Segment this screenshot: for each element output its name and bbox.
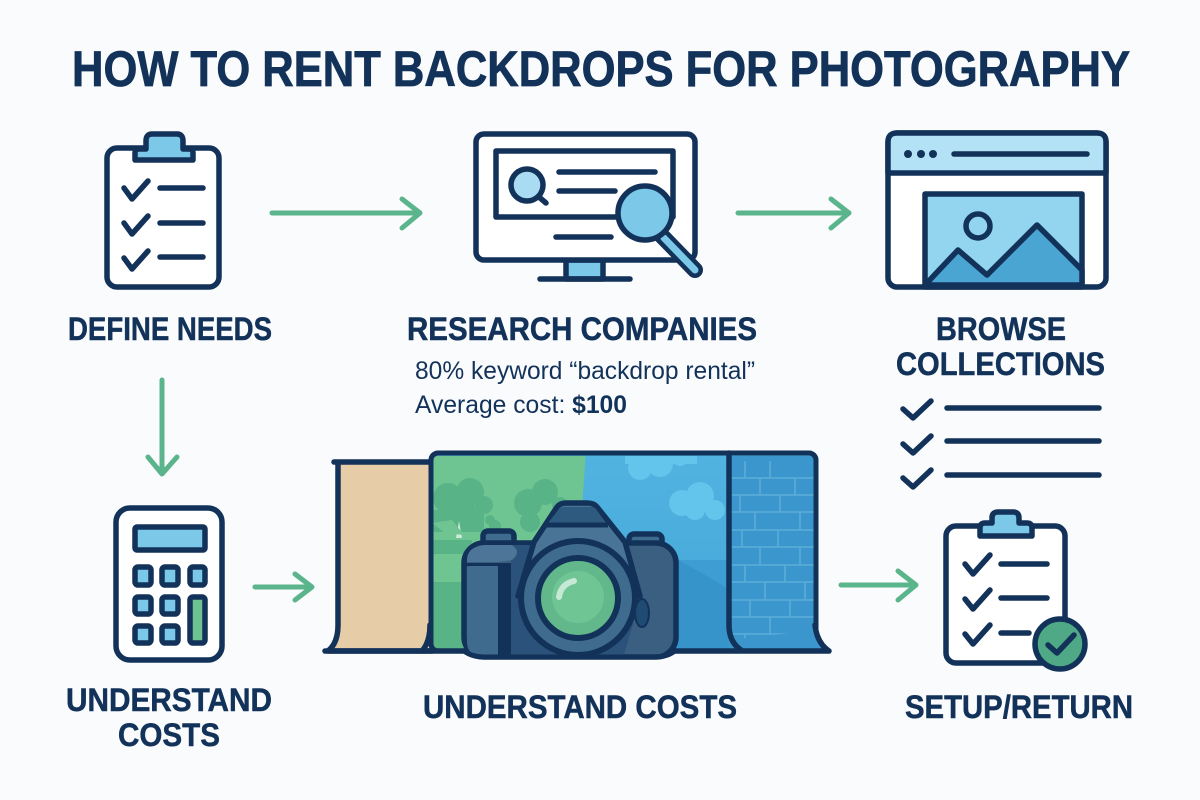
- label: setup return: SETUP/RETURN: [905, 689, 1133, 725]
- label: browse collections: COLLECTIONS: [896, 346, 1105, 382]
- label: understand costs left: COSTS: [118, 717, 220, 753]
- arrow: define to research: [272, 199, 420, 228]
- icon: browser window: [888, 133, 1106, 287]
- backdrop: green and blue scenic: [325, 450, 829, 660]
- label: define needs: DEFINE NEEDS: [68, 311, 272, 347]
- checklist under browse: [903, 401, 1099, 487]
- icon: camera: [464, 503, 676, 657]
- label: understand costs center: UNDERSTAND COSTS: [423, 689, 737, 725]
- arrow: calculator to backdrops: [255, 574, 312, 600]
- label: understand costs left: [66, 682, 272, 753]
- text: average cost: Average cost: $100: [415, 391, 627, 419]
- arrow: define to calculator: [148, 380, 177, 474]
- label: browse collections: BROWSE: [936, 311, 1066, 347]
- text: keyword note: 80% keyword “backdrop rental”: [415, 357, 755, 385]
- badge: green check: [1035, 619, 1085, 669]
- label: browse collections: [896, 311, 1105, 382]
- label: understand costs left: UNDERSTAND: [66, 682, 272, 718]
- label: research companies: RESEARCH COMPANIES: [407, 311, 757, 347]
- illustration: backdrops and camera: [325, 450, 829, 660]
- icon: clipboard setup return: [946, 512, 1085, 669]
- icon: calculator: [116, 508, 222, 660]
- icon: clipboard define needs: [107, 134, 219, 287]
- backdrop: tan paper: [328, 462, 432, 651]
- icon: monitor with magnifier: [476, 134, 695, 279]
- arrow: research to browse: [738, 199, 849, 228]
- arrow: backdrops to setup: [841, 571, 916, 600]
